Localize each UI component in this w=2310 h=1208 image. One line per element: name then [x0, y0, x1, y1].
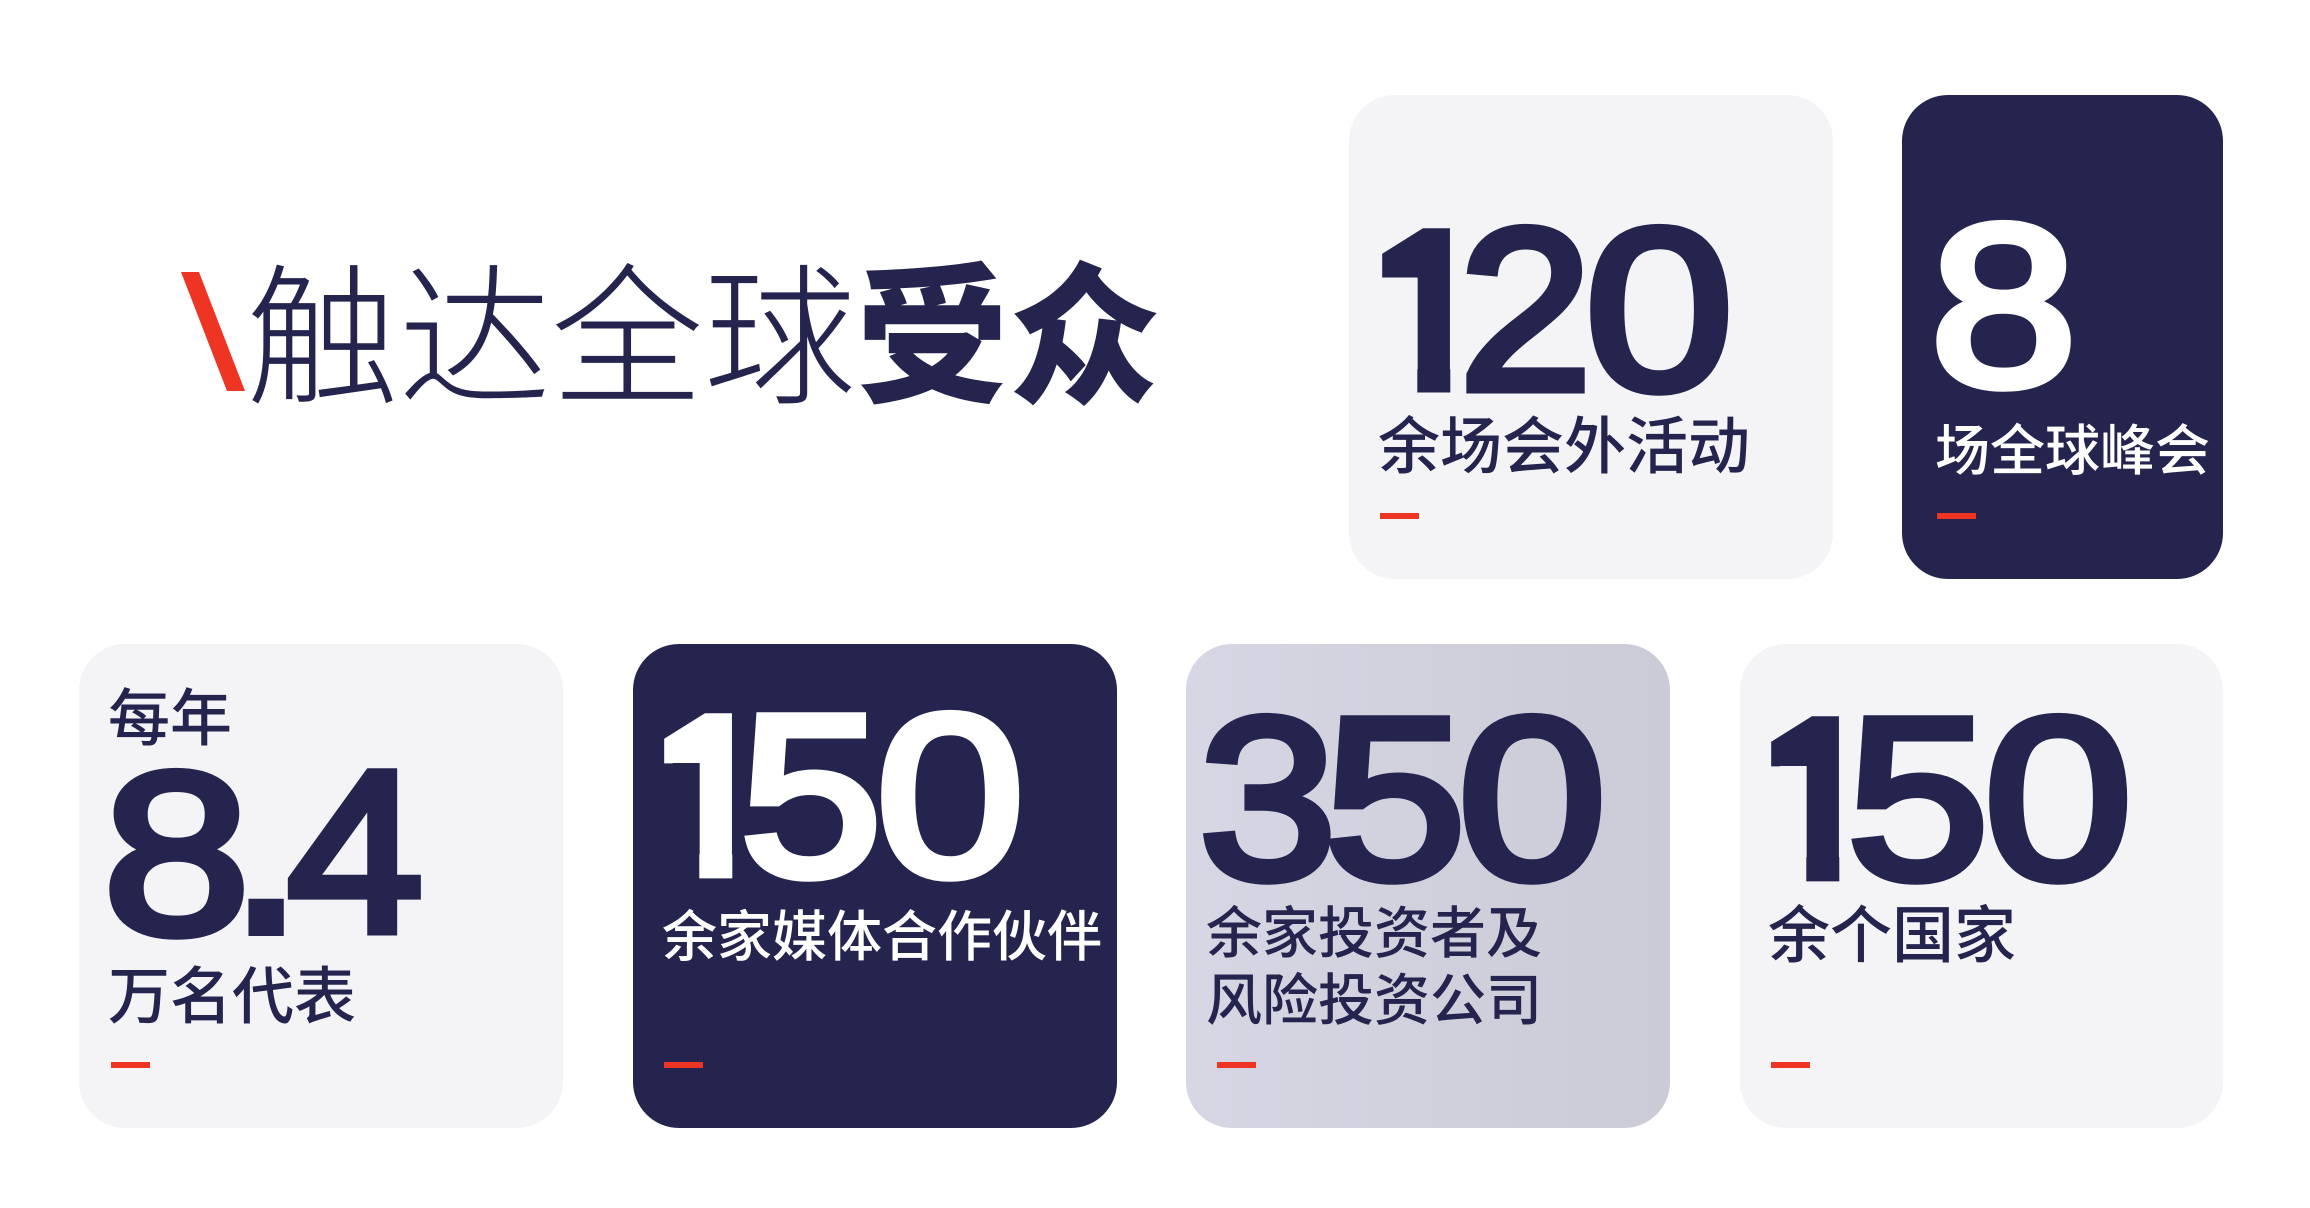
- panel: 150 countries: [1740, 644, 2223, 1128]
- number: 150: [664, 666, 1024, 924]
- number: 120: 1: [1359, 182, 1500, 440]
- red accent: [1937, 513, 1976, 519]
- title: [181, 215, 1161, 436]
- label: events: 余场会外活动: [1378, 396, 1750, 486]
- number: 120: 2: [1459, 180, 1592, 438]
- panel: 150 media partners: [633, 644, 1117, 1128]
- red accent: [1380, 513, 1419, 519]
- number: 8.4: [102, 710, 423, 988]
- number: 8: 8: [1930, 176, 2077, 434]
- number: 350: 0: [1458, 670, 1606, 926]
- label: investors: [1206, 889, 1542, 1037]
- number: 8.4: 8: [102, 724, 250, 982]
- number: 8.4: 4: [286, 723, 423, 980]
- label: investors: 余家投资者及: [1206, 889, 1542, 970]
- label: countries: 余个国家: [1768, 885, 2016, 975]
- number: 150: 0: [1984, 670, 2132, 926]
- number: 350: 3: [1199, 670, 1337, 926]
- panel: 120 events: [1349, 95, 1833, 579]
- panel: 8 summits: [1902, 95, 2223, 579]
- red accent: [1771, 1062, 1810, 1068]
- number: 150: 0: [876, 666, 1024, 924]
- red accent: [1217, 1062, 1256, 1068]
- label: media partners: 余家媒体合作伙伴: [662, 892, 1102, 972]
- number: 350: [1199, 670, 1606, 926]
- number: 150: [1771, 670, 2132, 926]
- title text: 触达全球受众: [246, 215, 1161, 436]
- number: 150: 1: [641, 668, 782, 925]
- panel: 8.4 delegates: [79, 644, 563, 1128]
- number: 350: 5: [1324, 670, 1465, 926]
- panel: 350 investors: [1186, 644, 1670, 1128]
- icon: red slash: [181, 272, 245, 391]
- number: 150: 5: [740, 666, 882, 924]
- label: summits: 场全球峰会: [1935, 406, 2210, 486]
- number: 150: 1: [1748, 671, 1889, 928]
- red accent: [664, 1062, 703, 1068]
- label: delegates: 万名代表: [108, 946, 356, 1036]
- label: every year: 每年: [108, 668, 232, 758]
- number: 150: 5: [1847, 670, 1989, 926]
- number: 120: [1382, 180, 1733, 438]
- red accent: [111, 1062, 150, 1068]
- number: 8.4: .: [232, 710, 301, 988]
- label: investors: 风险投资公司: [1206, 956, 1542, 1037]
- number: 120: 0: [1585, 180, 1733, 438]
